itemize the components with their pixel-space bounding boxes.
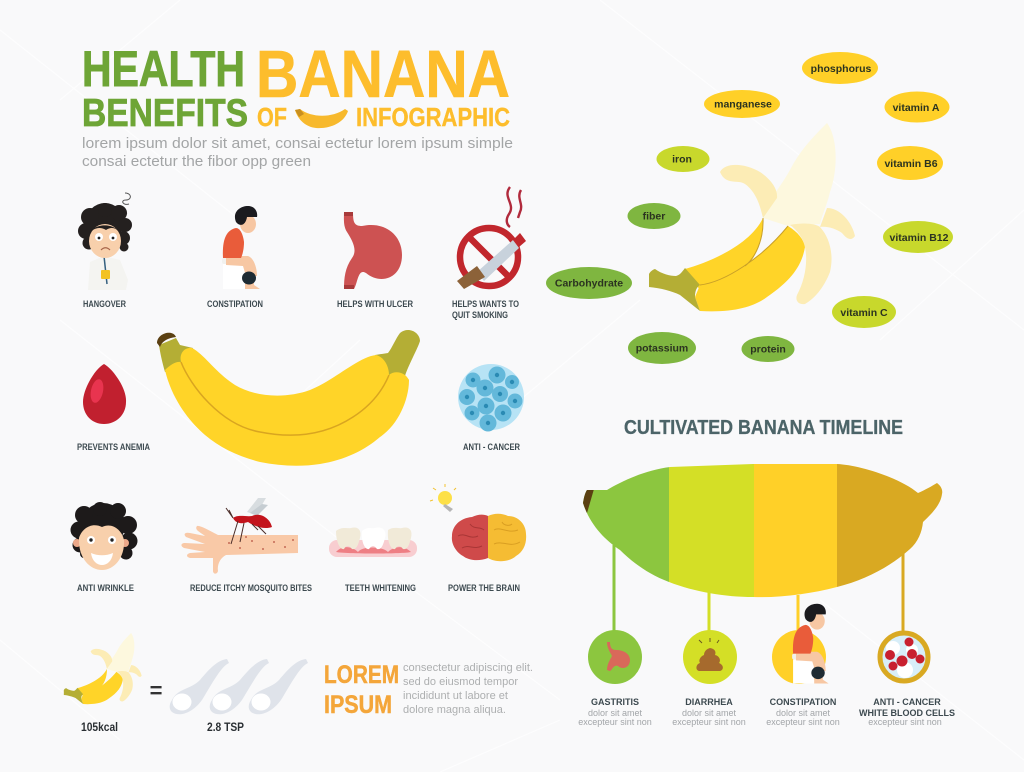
- heading: lorem ipsum: LOREM: [324, 661, 399, 689]
- label: diarrhea: dolor sit amet: [682, 708, 737, 718]
- label: ulcer: HELPS WITH ULCER: [337, 299, 413, 309]
- icon: stomach: [344, 212, 402, 289]
- label: gastritis: [578, 697, 652, 727]
- title: INFOGRAPHIC: [356, 102, 510, 132]
- label: anti cancer white blood cells: [859, 697, 955, 727]
- icon: blood cells in gold ring: [880, 633, 928, 681]
- bubble: vitamin B12: [883, 221, 953, 253]
- bubble: carbohydrate: [546, 267, 632, 299]
- bubble: fiber: [628, 203, 680, 229]
- icon: poop in lime circle: [683, 630, 737, 684]
- label: gastritis: dolor sit amet: [588, 708, 643, 718]
- nutrient bubbles: [546, 52, 953, 364]
- bubble: iron: iron: [672, 154, 692, 166]
- bubble: vitamin B12: vitamin B12: [890, 232, 949, 244]
- subtitle text: consai ectetur the fibor opp green: [82, 153, 311, 170]
- benefit: anemia: [77, 364, 150, 452]
- icon: light bulb: [430, 484, 456, 512]
- label: brain: POWER THE BRAIN: [448, 583, 520, 593]
- heading: lorem ipsum: [324, 661, 399, 719]
- title: OF: [257, 102, 287, 132]
- icon: no smoking: [457, 187, 526, 289]
- label: calories: 105kcal: [81, 720, 118, 734]
- benefit: brain: [430, 484, 526, 593]
- benefit: mosquito bites: [181, 498, 312, 593]
- label: constipation: CONSTIPATION: [207, 299, 263, 309]
- label: hangover: HANGOVER: [83, 299, 126, 309]
- connector stems: [614, 545, 903, 632]
- icon: two colour brain: [452, 514, 526, 561]
- step: anti cancer white blood cells: [859, 633, 955, 727]
- label: gastritis: excepteur sint non: [578, 717, 652, 727]
- label: anti cancer white blood cells: ANTI - CANCER: [873, 697, 941, 707]
- text block: dolore magna aliqua.: [403, 704, 506, 716]
- subtitle text: [82, 135, 513, 170]
- bubble: vitamin A: vitamin A: [893, 102, 940, 114]
- icon: teeth: [329, 527, 417, 557]
- text block: incididunt ut labore et: [403, 690, 508, 702]
- label: constipation: [766, 697, 840, 727]
- bubble: potassium: potassium: [636, 342, 688, 354]
- icon: small peeled banana: [64, 633, 142, 704]
- timeline heading: CULTIVATED BANANA TIMELINE: [624, 417, 903, 439]
- benefit: teeth whitening: [329, 527, 417, 593]
- label: diarrhea: [672, 697, 746, 727]
- bubble: iron: [656, 146, 710, 172]
- bubble: vitamin B6: [877, 146, 943, 180]
- heading: lorem ipsum: IPSUM: [324, 691, 392, 719]
- label: anti cancer white blood cells: WHITE BLOOD CELLS: [859, 708, 955, 718]
- bubble: vitamin C: vitamin C: [840, 307, 888, 319]
- illustration: large banana: [157, 330, 420, 466]
- label: gastritis: GASTRITIS: [591, 697, 639, 707]
- label: quit smoking: QUIT SMOKING: [452, 310, 508, 320]
- benefit: hangover: [78, 193, 132, 309]
- bubble: protein: [742, 336, 794, 362]
- bubble: phosphorus: phosphorus: [811, 63, 871, 75]
- equals sign: =: [150, 678, 162, 703]
- icon: smiling face: [70, 502, 138, 570]
- label: diarrhea: DIARRHEA: [685, 697, 733, 707]
- title: BENEFITS: [82, 92, 248, 135]
- label: anti cancer: ANTI - CANCER: [463, 442, 520, 452]
- benefit: quit smoking: [452, 187, 526, 320]
- label: anemia: PREVENTS ANEMIA: [77, 442, 150, 452]
- bubble: phosphorus: [802, 52, 878, 84]
- icon: person on toilet: [222, 206, 260, 289]
- label: anti cancer white blood cells: excepteur sint non: [868, 717, 942, 727]
- label: quit smoking: [452, 299, 519, 320]
- benefit: anti cancer: [458, 364, 524, 452]
- title: HEALTH: [82, 41, 245, 97]
- lorem ipsum note: [324, 661, 533, 719]
- illustration: peeled banana: [649, 123, 855, 311]
- title: [82, 37, 510, 135]
- label: quit smoking: HELPS WANTS TO: [452, 299, 519, 309]
- bubble: carbohydrate: Carbohydrate: [555, 278, 623, 290]
- bubble: protein: protein: [750, 344, 786, 356]
- subtitle text: lorem ipsum dolor sit amet, consai ectetur lorem ipsum simple: [82, 135, 513, 152]
- title: BANANA: [256, 37, 510, 112]
- icon: blood drop: [83, 364, 126, 424]
- bubble: manganese: [704, 90, 780, 118]
- label: teeth whitening: TEETH WHITENING: [345, 583, 416, 593]
- label: constipation: dolor sit amet: [776, 708, 831, 718]
- icon: three sugar spoons: [170, 659, 308, 714]
- icon: person in yellow circle: [772, 604, 829, 684]
- text block: sed do eiusmod tempor: [403, 676, 518, 688]
- bubble: vitamin C: [832, 296, 896, 328]
- icon: arm with mosquito: [181, 498, 298, 574]
- bubble: vitamin A: [884, 92, 950, 122]
- benefit: constipation: [207, 206, 263, 309]
- bubble: potassium: [628, 332, 696, 364]
- text block: consectetur adipiscing elit.: [403, 662, 533, 674]
- calorie comparison: [64, 633, 308, 734]
- label: constipation: excepteur sint non: [766, 717, 840, 727]
- label: teaspoons: 2.8 TSP: [207, 720, 244, 734]
- bubble: vitamin B6: vitamin B6: [884, 158, 938, 170]
- step: gastritis: [578, 630, 652, 727]
- label: mosquito bites: REDUCE ITCHY MOSQUITO BITES: [190, 583, 312, 593]
- label: constipation: CONSTIPATION: [770, 697, 836, 707]
- text block: [403, 662, 533, 716]
- icon: cells: [458, 364, 524, 432]
- step: diarrhea: [672, 630, 746, 727]
- benefit: ulcer: [337, 212, 413, 309]
- benefit: anti wrinkle: [70, 502, 138, 593]
- bubble: manganese: manganese: [714, 98, 772, 110]
- icon: hungover person: [78, 193, 132, 290]
- step: constipation: [766, 604, 840, 727]
- label: anti wrinkle: ANTI WRINKLE: [77, 583, 134, 593]
- bubble: fiber: fiber: [643, 210, 665, 222]
- chart: banana ripeness timeline: [580, 460, 945, 600]
- label: diarrhea: excepteur sint non: [672, 717, 746, 727]
- icon: stomach in green circle: [588, 630, 642, 684]
